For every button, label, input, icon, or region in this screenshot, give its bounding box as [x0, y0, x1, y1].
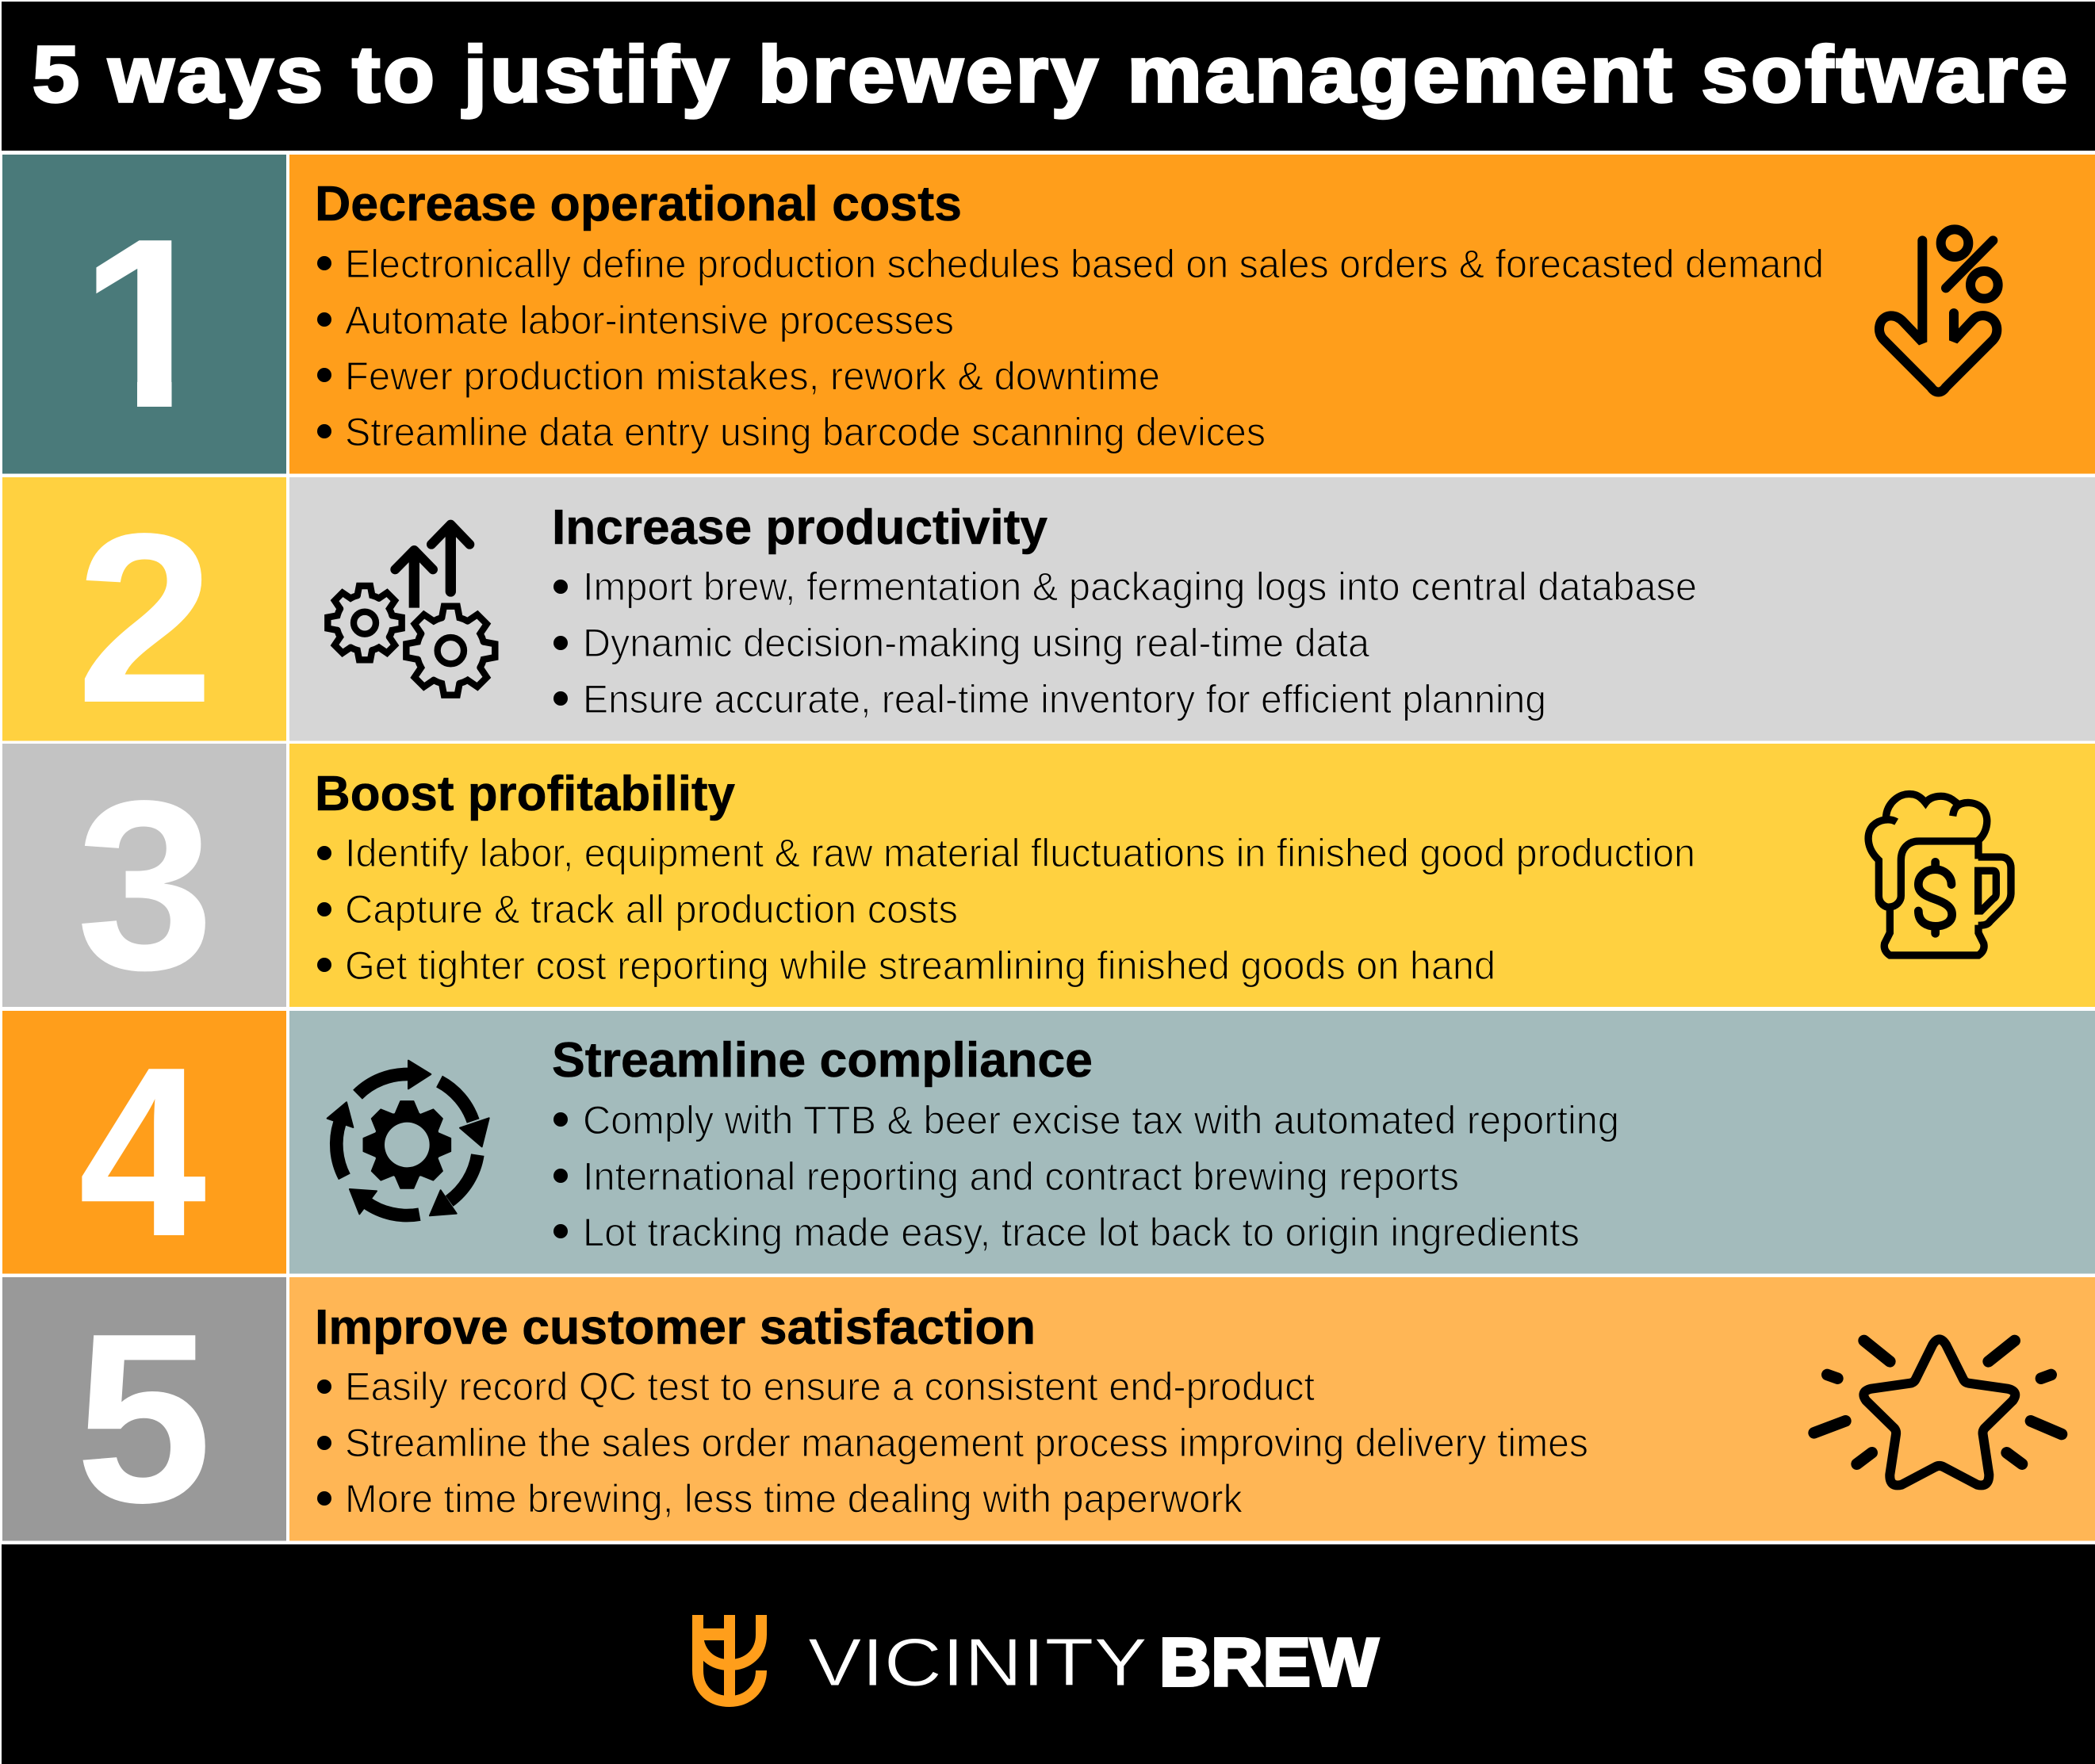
bullet list: Identify labor, equipment & raw material fluctuations in finished good production [345, 831, 1695, 875]
bullet list: International reporting and contract brewing reports [583, 1154, 1459, 1199]
number tile 2: 2 [76, 484, 214, 753]
bullet list: More time brewing, less time dealing with paperwork [345, 1476, 1243, 1521]
heading: Streamline compliance [552, 1033, 1093, 1088]
panel: streamline compliance [289, 1011, 2095, 1273]
bullet list: Streamline data entry using barcode scanning devices [345, 410, 1266, 454]
bullet list [553, 564, 1697, 721]
bullet list: Streamline the sales order management process improving delivery times [345, 1421, 1588, 1465]
panel: increase productivity [289, 477, 2095, 740]
title: 5 ways to justify brewery management software [33, 30, 2067, 118]
panel: improve customer satisfaction [289, 1277, 2095, 1541]
bullet list [317, 831, 1695, 988]
logo wordmark [808, 1625, 1379, 1701]
row 5: improve customer satisfaction [2, 1277, 2095, 1553]
logo wordmark: VICINITY [808, 1625, 1147, 1701]
bullet list: Easily record QC test to ensure a consistent end-product [345, 1364, 1315, 1409]
panel: boost profitability [289, 744, 2095, 1007]
panel: decrease operational costs [289, 155, 2095, 474]
logo wordmark: BREW [1159, 1625, 1379, 1701]
number tile 5: 5 [75, 1284, 212, 1553]
bullet list [317, 1364, 1588, 1521]
heading: Decrease operational costs [315, 177, 962, 232]
number tile 1 [2, 155, 286, 474]
header band [2, 2, 2095, 151]
bullet list: Get tighter cost reporting while streamlining finished goods on hand [345, 943, 1496, 988]
number tile 4: 4 [79, 1017, 208, 1288]
row 3: boost profitability [2, 744, 2095, 1020]
bullet list: Comply with TTB & beer excise tax with automated reporting [583, 1098, 1619, 1142]
bullet list: Capture & track all production costs [345, 887, 958, 932]
footer band [2, 1544, 2095, 1764]
number tile 1: 1 [79, 188, 217, 458]
icon: shining star [1814, 1339, 2062, 1485]
row 1: decrease operational costs [2, 155, 2095, 474]
number tile 5 [2, 1277, 286, 1553]
heading: Boost profitability [315, 767, 736, 821]
icon: percent with down arrow [1879, 229, 1998, 392]
heading: Improve customer satisfaction [315, 1300, 1036, 1355]
bullet list [317, 242, 1824, 454]
icon: gears with up arrows [327, 525, 495, 695]
bullet list [553, 1098, 1619, 1254]
bullet list: Automate labor-intensive processes [345, 298, 954, 342]
bullet list: Ensure accurate, real-time inventory for efficient planning [583, 677, 1546, 721]
row 2: increase productivity [2, 477, 2095, 753]
number tile 3: 3 [76, 751, 214, 1020]
number tile 2 [2, 477, 286, 753]
heading: Increase productivity [552, 500, 1048, 555]
bullet list: Fewer production mistakes, rework & downtime [345, 354, 1160, 398]
number tile 4 [2, 1011, 286, 1288]
bullet list: Electronically define production schedules based on sales orders & forecasted demand [345, 242, 1824, 286]
icon: beer mug with dollar sign [1868, 794, 2011, 955]
bullet list: Dynamic decision-making using real-time data [583, 621, 1369, 665]
bullet list: Lot tracking made easy, trace lot back to origin ingredients [583, 1210, 1580, 1254]
icon: gear with circular arrows [327, 1061, 489, 1215]
number tile 3 [2, 744, 286, 1020]
bullet list: Import brew, fermentation & packaging logs into central database [583, 564, 1697, 609]
logo mark [698, 1615, 761, 1701]
row 4: streamline compliance [2, 1011, 2095, 1288]
